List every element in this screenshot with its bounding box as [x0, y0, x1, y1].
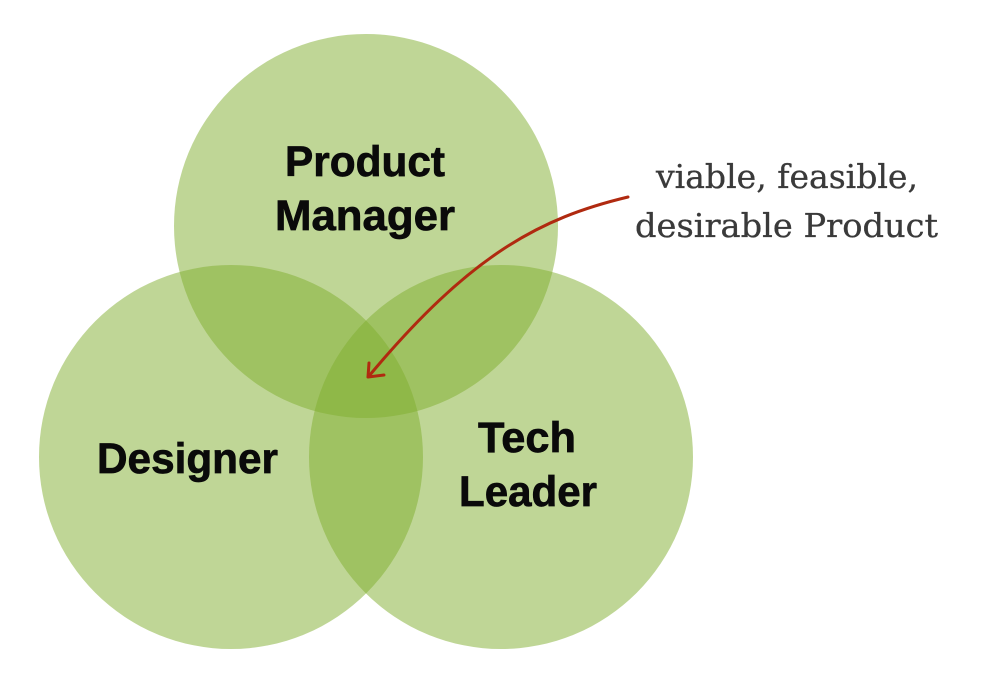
- callout text: viable, feasible, desirable Product: desirable Product: [635, 206, 938, 245]
- label: Product Manager: Manager: [275, 192, 455, 240]
- label: Tech Leader: [459, 414, 597, 516]
- arrow: callout to center intersection: [368, 197, 628, 377]
- label: Product Manager: Product: [285, 138, 445, 186]
- label: Tech Leader: Leader: [459, 468, 597, 516]
- label: Designer: Designer: [97, 435, 278, 483]
- label: Tech Leader: Tech: [478, 414, 576, 462]
- venn circle: Product Manager: [174, 34, 558, 418]
- callout text: viable, feasible, desirable Product: viable, feasible,: [655, 157, 918, 196]
- venn circle: Tech Leader: [309, 265, 693, 649]
- label: Product Manager: [275, 138, 455, 240]
- callout text: viable, feasible, desirable Product: [635, 157, 938, 245]
- venn circle: Designer: [39, 265, 423, 649]
